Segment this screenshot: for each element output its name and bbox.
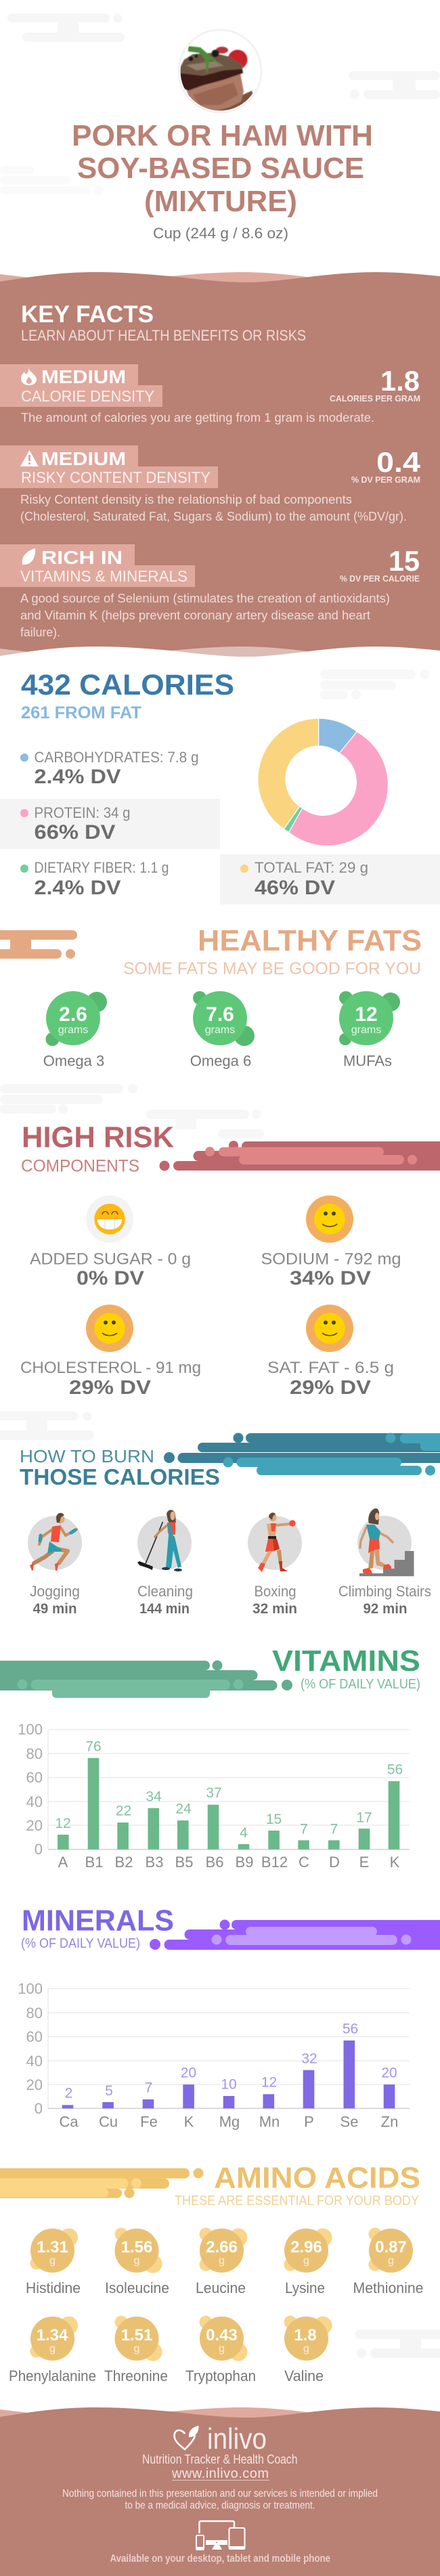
amino acid: phenylalanine: g (49, 2343, 56, 2355)
risk: saturated fat: 29% DV (290, 1377, 372, 1399)
amino acid: threonine: 1.51 (121, 2326, 152, 2344)
amino acid: histidine: Histidine (26, 2279, 81, 2296)
activity labels: Cleaning (137, 1583, 193, 1600)
bar chart: minerals: 32 (301, 2051, 317, 2066)
healthy fat: omega 6: 7.6 (206, 1003, 234, 1026)
amino acid: tryptophan: 0.43 (206, 2326, 238, 2344)
heading: healthy fats: SOME FATS MAY BE GOOD FOR YOU (123, 959, 421, 978)
decoration: minerals (150, 1920, 440, 1950)
amino acid: lysine (284, 2229, 332, 2296)
fact: rich in vitamins and minerals: 15 (389, 545, 420, 577)
heading: calories (21, 669, 234, 722)
bar chart: minerals: 60 (26, 2028, 43, 2045)
legend: carbohydrates (20, 749, 199, 788)
healthy fat: omega 6 (190, 991, 255, 1070)
amino acid: phenylalanine: 1.34 (37, 2326, 68, 2344)
panel: key facts (0, 272, 440, 683)
activity labels (30, 1583, 431, 1617)
decoration: burn calories (164, 1433, 440, 1476)
legend: protein: 66% DV (34, 821, 115, 844)
healthy fat: omega 3 (43, 991, 107, 1070)
bar chart: minerals: Ca (60, 2114, 79, 2131)
healthy fat: MUFAs: MUFAs (343, 1053, 392, 1070)
footer disclaimer (62, 2488, 378, 2512)
bar chart: vitamins: B9 (236, 1854, 253, 1871)
activity labels: 92 min (363, 1601, 408, 1617)
bar chart: minerals: 20 (26, 2076, 43, 2093)
bar chart: minerals: Fe (140, 2114, 158, 2131)
footer tagline: Nutrition Tracker & Health Coach (142, 2453, 298, 2467)
footer disclaimer: Nothing contained in this presentation and our services is intended or implied (62, 2488, 378, 2499)
fact: calorie density: 1.8 (380, 365, 420, 397)
fact: rich in vitamins and minerals: % DV PER CALORIE (340, 573, 420, 584)
bar chart: minerals: 56 (343, 2021, 358, 2036)
fact: rich in vitamins and minerals: and Vitamin K (helps prevent coronary artery disease and heart (20, 609, 370, 622)
healthy fat: MUFAs: grams (351, 1024, 381, 1036)
heading: vitamins (272, 1644, 420, 1692)
bar chart: vitamins: 24 (175, 1801, 192, 1816)
logo: inlivo (175, 2422, 267, 2455)
bar chart: vitamins: 7 (330, 1821, 338, 1837)
logo: inlivo: inlivo (207, 2422, 267, 2455)
healthy fat: MUFAs: 12 (355, 1003, 378, 1026)
amino acid: histidine (26, 2229, 81, 2296)
decoration: high risk (160, 1141, 440, 1171)
bar chart: minerals: 12 (261, 2075, 277, 2091)
bar chart: vitamins: 22 (116, 1804, 131, 1819)
heading: healthy fats: HEALTHY FATS (198, 924, 422, 957)
amino acid: phenylalanine: Phenylalanine (9, 2367, 96, 2384)
fact: calorie density: The amount of calories you are getting from 1 gram is moderate. (21, 411, 374, 424)
amino acid: tryptophan (185, 2315, 256, 2384)
bar chart: vitamins: C (299, 1854, 309, 1871)
amino acid: histidine: 1.31 (37, 2238, 68, 2256)
amino acid: leucine: 2.66 (206, 2238, 238, 2256)
risk: sodium: SODIUM - 792 mg (261, 1250, 401, 1269)
footer disclaimer: to be a medical advice, diagnosis or treatment. (125, 2500, 315, 2512)
legend: dietary fiber (20, 859, 169, 899)
bar chart: vitamins: 12 (55, 1816, 71, 1831)
activity labels: Jogging (30, 1583, 80, 1600)
legend: protein: PROTEIN: 34 g (34, 804, 130, 821)
bar chart: minerals: 40 (26, 2053, 43, 2070)
amino acid: methionine: 0.87 (375, 2238, 407, 2256)
bar chart: minerals: 100 (18, 1980, 43, 1997)
amino acid: phenylalanine (9, 2317, 96, 2384)
activity: boxing (248, 1512, 302, 1572)
bar chart: vitamins: 7 (300, 1821, 308, 1837)
heading: high risk (21, 1121, 174, 1175)
bar chart: minerals: 20 (181, 2065, 196, 2080)
bar chart: vitamins: 40 (26, 1793, 43, 1810)
legend: total fat: TOTAL FAT: 29 g (255, 859, 368, 876)
amino acid: valine: g (303, 2343, 309, 2355)
bar chart: minerals: Mg (219, 2114, 240, 2131)
healthy fat: omega 3: 2.6 (59, 1003, 87, 1026)
activity labels: Climbing Stairs (338, 1583, 431, 1600)
healthy fat: omega 6: grams (205, 1024, 235, 1036)
legend: protein (0, 799, 220, 849)
amino acid: methionine: Methionine (353, 2279, 424, 2296)
bar chart: minerals (18, 1980, 410, 2131)
legend: total fat: 46% DV (255, 877, 335, 899)
amino acid: threonine: g (134, 2343, 139, 2355)
bar chart: vitamins: 17 (356, 1810, 372, 1826)
background cloud: calories (320, 670, 430, 699)
fact: calorie density: CALORIE DENSITY (21, 387, 154, 405)
risk: cholesterol: 29% DV (69, 1377, 152, 1399)
bar chart: minerals: 2 (65, 2085, 72, 2101)
amino acid: valine: Valine (284, 2367, 324, 2384)
amino acid: lysine: 2.96 (290, 2238, 322, 2256)
heading: key facts (21, 301, 306, 344)
healthy fat: omega 6: Omega 6 (190, 1053, 251, 1070)
bar chart: vitamins: 20 (26, 1817, 43, 1834)
legend: total fat (220, 854, 440, 904)
fact: calorie density: MEDIUM (41, 366, 126, 387)
bar chart: vitamins: B2 (115, 1854, 133, 1871)
heading: amino acids (175, 2162, 420, 2208)
bar chart: vitamins: 34 (146, 1789, 162, 1805)
bar chart: minerals: K (184, 2114, 194, 2131)
title: PORK OR HAM WITH (72, 119, 373, 152)
bar chart: vitamins: 15 (266, 1812, 282, 1827)
legend: carbohydrates: 2.4% DV (34, 766, 120, 788)
amino acid: tryptophan: g (219, 2343, 225, 2355)
amino acid: lysine: g (303, 2255, 309, 2267)
fact: risky content density: Risky Content density is the relationship of bad components (20, 493, 352, 506)
heading: minerals (21, 1904, 174, 1951)
activity labels: 144 min (139, 1601, 190, 1617)
bar chart: minerals: 5 (105, 2083, 113, 2099)
bar chart: minerals: Se (340, 2114, 358, 2131)
heading: high risk: COMPONENTS (21, 1156, 139, 1175)
bar chart: minerals: P (304, 2114, 314, 2131)
food photo (179, 30, 261, 112)
heading: minerals: MINERALS (22, 1904, 174, 1938)
bar chart: vitamins: E (359, 1854, 369, 1871)
fact: rich in vitamins and minerals: A good source of Selenium (stimulates the creation of antioxidants) (20, 592, 390, 605)
amino acid: leucine (196, 2227, 248, 2296)
amino acid: isoleucine: g (134, 2255, 139, 2267)
bar chart: vitamins: A (58, 1854, 68, 1871)
fact: risky content density (0, 445, 421, 523)
heading: vitamins: (% OF DAILY VALUE) (301, 1677, 420, 1692)
bar chart: minerals: Mn (259, 2114, 280, 2131)
bar chart: vitamins: B3 (146, 1854, 163, 1871)
amino acid: tryptophan: Tryptophan (185, 2367, 256, 2384)
heading: vitamins: VITAMINS (272, 1644, 420, 1678)
footer website: www.inlivo.com (171, 2466, 269, 2481)
fact: risky content density: RISKY CONTENT DENSITY (21, 468, 211, 486)
risk: sodium: 34% DV (290, 1268, 372, 1290)
heading: calories: 432 CALORIES (21, 669, 234, 701)
footer availability note: Available on your desktop, tablet and mobile phone (110, 2553, 330, 2564)
bar chart: vitamins: B5 (175, 1854, 193, 1871)
heading: high risk: HIGH RISK (22, 1121, 174, 1154)
amino acid: valine: 1.8 (294, 2326, 317, 2344)
background clouds: high risk (0, 1084, 264, 1139)
legend: dietary fiber: DIETARY FIBER: 1.1 g (34, 859, 169, 876)
fact: calorie density (0, 364, 420, 424)
fact: risky content density: (Cholesterol, Saturated Fat, Sugars & Sodium) to the amount (%DV/gr). (20, 510, 407, 523)
donut chart (258, 718, 388, 846)
title (72, 119, 373, 218)
fact: rich in vitamins and minerals: RICH IN (41, 547, 123, 568)
panel: footer (0, 2407, 440, 2576)
heading: amino acids: THESE ARE ESSENTIAL FOR YOUR BODY (175, 2193, 419, 2208)
amino acid: threonine (104, 2315, 168, 2384)
activity labels: Boxing (255, 1583, 296, 1600)
bar chart: vitamins: 76 (85, 1739, 102, 1755)
heading: minerals: (% OF DAILY VALUE) (21, 1936, 140, 1951)
bar chart: minerals: 7 (145, 2080, 152, 2096)
bar chart: minerals: 10 (221, 2077, 237, 2093)
decoration: healthy fats (0, 930, 77, 959)
bar chart: vitamins: D (329, 1854, 340, 1871)
decoration: vitamins (0, 1660, 292, 1698)
legend: carbohydrates: CARBOHYDRATES: 7.8 g (34, 749, 199, 766)
bar chart: minerals: Zn (381, 2114, 398, 2131)
healthy fat: omega 3: grams (58, 1024, 88, 1036)
heading: burn calories: THOSE CALORIES (20, 1464, 220, 1489)
bar chart: vitamins: 0 (35, 1841, 43, 1858)
bar chart: vitamins: 56 (387, 1762, 403, 1778)
heading: healthy fats (123, 924, 422, 978)
amino acid: leucine: Leucine (196, 2279, 246, 2296)
background cloud: amino acids (355, 2330, 440, 2358)
bar chart: vitamins: 4 (240, 1825, 248, 1841)
risk: saturated fat (267, 1305, 394, 1399)
fact: rich in vitamins and minerals: VITAMINS & MINERALS (20, 567, 188, 585)
fact: risky content density: MEDIUM (41, 448, 126, 469)
title: (MIXTURE) (144, 185, 297, 218)
activity: climbing stairs (357, 1508, 414, 1576)
healthy fat: omega 3: Omega 3 (43, 1053, 104, 1070)
bar chart: vitamins: 80 (26, 1745, 43, 1762)
bar chart: minerals: 80 (26, 2005, 43, 2022)
bar chart: vitamins: K (390, 1854, 400, 1871)
bar chart: vitamins: 100 (18, 1721, 43, 1738)
risk: added sugar (30, 1196, 191, 1290)
bar chart: vitamins: B12 (261, 1854, 288, 1871)
bar chart: minerals: Cu (99, 2114, 118, 2131)
bar chart: vitamins: B1 (85, 1854, 103, 1871)
risk: added sugar: ADDED SUGAR - 0 g (30, 1250, 191, 1269)
bar chart: minerals: 0 (35, 2100, 43, 2117)
healthy fat: MUFAs (339, 991, 400, 1070)
activity labels: 49 min (32, 1601, 77, 1617)
serving size: Cup (244 g / 8.6 oz) (153, 225, 288, 242)
heading: key facts: LEARN ABOUT HEALTH BENEFITS OR RISKS (21, 327, 306, 344)
fact: rich in vitamins and minerals: failure). (20, 626, 60, 639)
background clouds: top (0, 14, 440, 195)
bar chart: vitamins: B6 (206, 1854, 223, 1871)
title: SOY-BASED SAUCE (77, 152, 364, 185)
amino acid: isoleucine (105, 2227, 169, 2296)
risk: cholesterol (20, 1305, 201, 1399)
risk: saturated fat: SAT. FAT - 6.5 g (267, 1359, 394, 1377)
fact: risky content density: % DV PER GRAM (351, 475, 420, 485)
amino acid: histidine: g (49, 2255, 56, 2267)
bar chart: minerals: 20 (381, 2065, 397, 2080)
fact: calorie density: CALORIES PER GRAM (330, 393, 420, 403)
amino acid: leucine: g (219, 2255, 225, 2267)
activity: jogging (28, 1513, 82, 1571)
heading: burn calories: HOW TO BURN (20, 1446, 154, 1466)
amino acid: lysine: Lysine (285, 2279, 325, 2296)
amino acid: methionine: g (388, 2255, 394, 2267)
heading: calories: 261 FROM FAT (21, 703, 141, 722)
amino acid: isoleucine: Isoleucine (105, 2279, 169, 2296)
decoration: amino acids (0, 2168, 203, 2198)
bar chart: vitamins: 60 (26, 1769, 43, 1786)
risk: added sugar: 0% DV (76, 1268, 145, 1290)
heading: key facts: KEY FACTS (21, 301, 154, 328)
heading: burn calories (20, 1446, 220, 1489)
fact: risky content density: 0.4 (376, 446, 421, 478)
legend: dietary fiber: 2.4% DV (34, 877, 120, 899)
heading: amino acids: AMINO ACIDS (214, 2162, 420, 2195)
amino acid: threonine: Threonine (104, 2367, 168, 2384)
activity labels: 32 min (252, 1601, 297, 1617)
amino acid: isoleucine: 1.56 (121, 2238, 152, 2256)
amino acid: methionine (353, 2227, 424, 2296)
bar chart: vitamins: 37 (206, 1785, 222, 1801)
risk: cholesterol: CHOLESTEROL - 91 mg (20, 1359, 201, 1377)
risk: sodium (261, 1196, 401, 1290)
amino acid: valine (284, 2315, 332, 2384)
activity: cleaning (137, 1510, 192, 1571)
bar chart: vitamins (18, 1721, 410, 1871)
icon: devices (196, 2521, 245, 2550)
background cloud: burn calories (0, 1412, 94, 1440)
fact: rich in vitamins and minerals (0, 544, 420, 639)
